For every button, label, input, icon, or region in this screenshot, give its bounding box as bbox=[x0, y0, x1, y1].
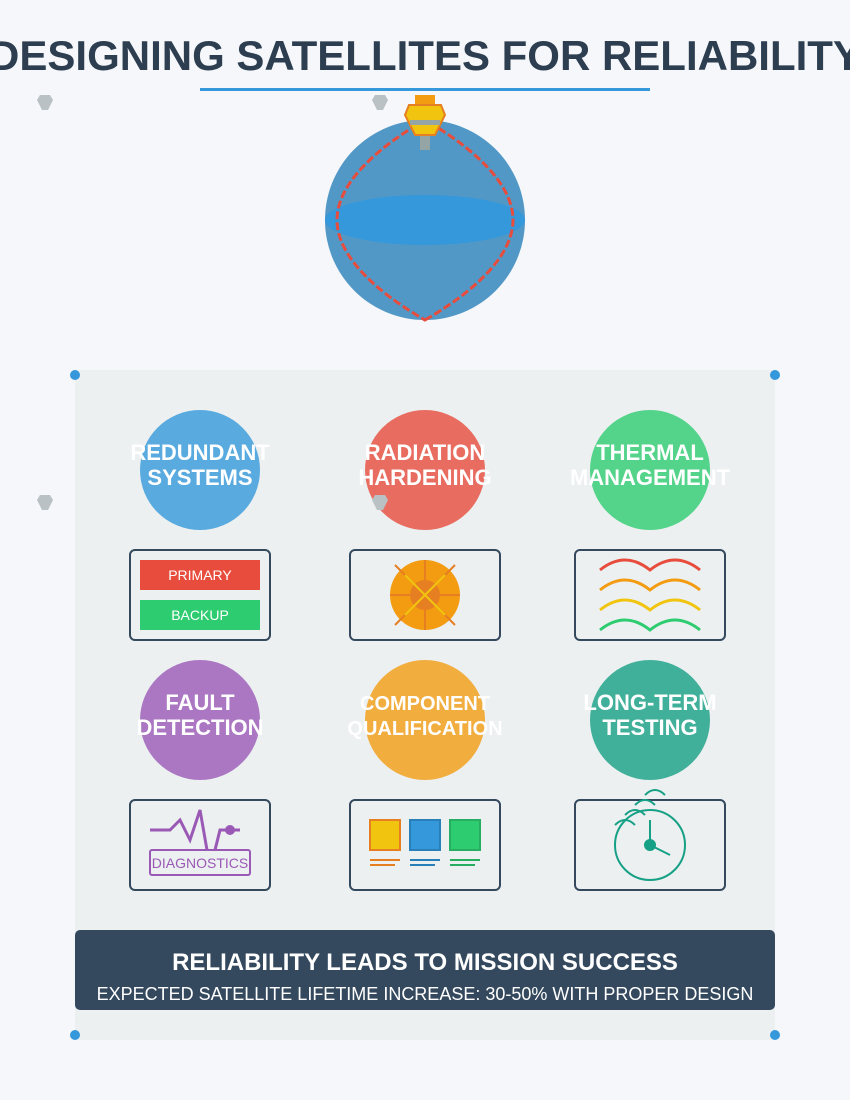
satellite bbox=[405, 95, 445, 150]
icon: radiation shield bbox=[350, 550, 500, 640]
heading: radiation hardening bbox=[358, 410, 492, 530]
heading: component qualification bbox=[347, 660, 503, 780]
heading: long-term testing: LONG-TERM bbox=[583, 690, 717, 715]
heading: radiation hardening: HARDENING bbox=[358, 465, 492, 490]
title underline bbox=[200, 88, 650, 91]
icon: long-term clock bbox=[575, 790, 725, 890]
icon: diagnostics bbox=[130, 800, 270, 890]
heading: component qualification: COMPONENT bbox=[360, 693, 490, 715]
heading: redundant systems: SYSTEMS bbox=[147, 465, 253, 490]
icon: diagnostics: DIAGNOSTICS bbox=[152, 855, 248, 871]
corner dots bbox=[70, 370, 780, 1040]
callout: mission success banner: RELIABILITY LEADS TO MISSION SUCCESS bbox=[172, 949, 678, 976]
heading: fault detection: FAULT bbox=[165, 690, 235, 715]
decorative bolts bbox=[37, 95, 388, 510]
heading: radiation hardening: RADIATION bbox=[365, 440, 485, 465]
equator band bbox=[325, 195, 525, 245]
heading: redundant systems bbox=[130, 410, 270, 530]
title: DESIGNING SATELLITES FOR RELIABILITY bbox=[0, 32, 850, 79]
icon: primary and backup: PRIMARY bbox=[168, 567, 232, 583]
earth globe bbox=[325, 120, 525, 320]
icon: primary and backup bbox=[130, 550, 270, 640]
heading: long-term testing: TESTING bbox=[602, 715, 698, 740]
panel: reliability factors bbox=[70, 370, 780, 1040]
orbit path bbox=[337, 120, 513, 320]
heading: component qualification: QUALIFICATION bbox=[347, 718, 503, 740]
earth and satellite illustration bbox=[325, 95, 525, 320]
icon: primary and backup: BACKUP bbox=[171, 607, 229, 623]
heading: thermal management: THERMAL bbox=[596, 440, 704, 465]
heading: thermal management bbox=[570, 410, 731, 530]
heading: fault detection: DETECTION bbox=[136, 715, 264, 740]
icon: thermal waves bbox=[575, 550, 725, 640]
callout: mission success banner bbox=[75, 930, 775, 1010]
heading: fault detection bbox=[136, 660, 264, 780]
heading: long-term testing bbox=[583, 660, 717, 780]
heading: thermal management: MANAGEMENT bbox=[570, 465, 731, 490]
heading: redundant systems: REDUNDANT bbox=[130, 440, 270, 465]
icon: qualified components bbox=[350, 800, 500, 890]
callout: mission success banner: EXPECTED SATELLITE LIFETIME INCREASE: 30-50% WITH PROPER DESIGN bbox=[97, 984, 753, 1004]
